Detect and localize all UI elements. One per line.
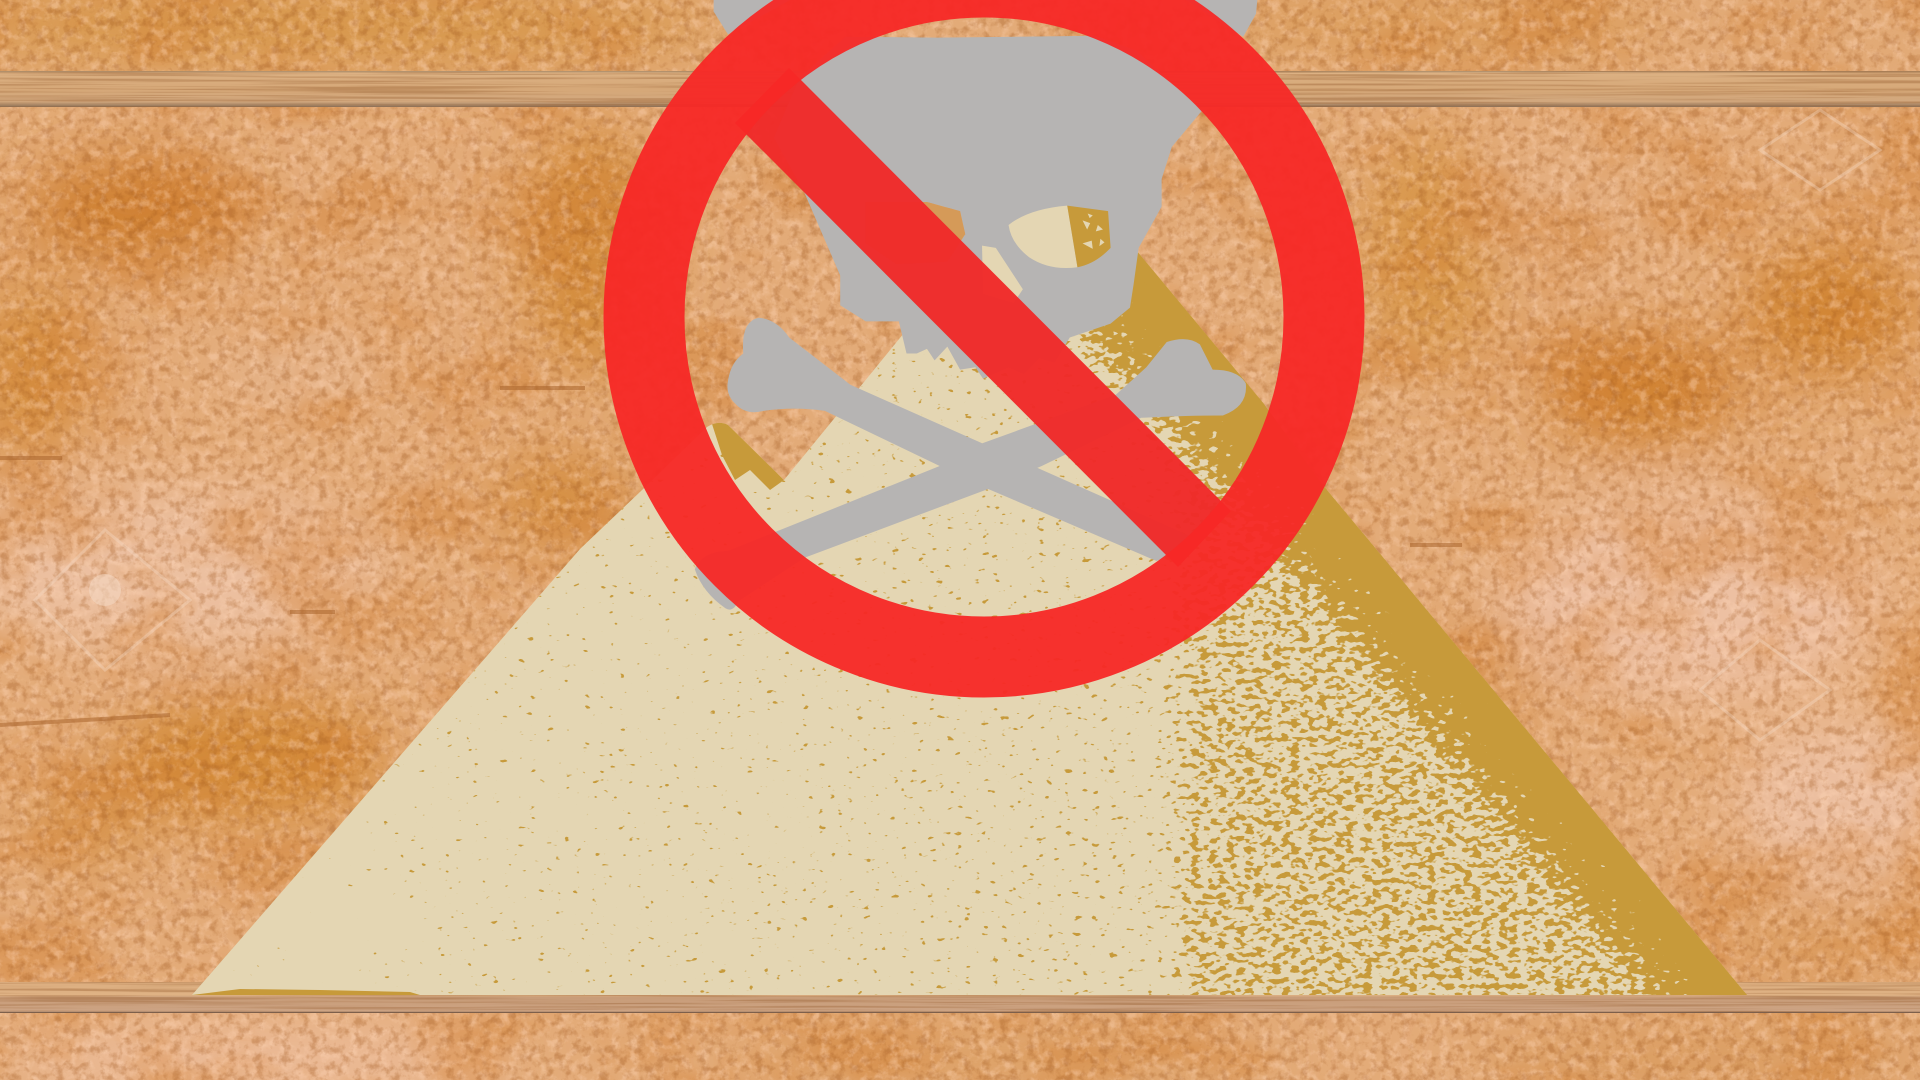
crossbone one <box>727 318 1192 561</box>
red slash <box>735 68 1231 567</box>
pyramid upper right shade <box>1138 252 1264 404</box>
pyramid shaded right edge <box>1065 252 1747 995</box>
skull cranium and jaw <box>774 36 1202 379</box>
nose cavity <box>982 246 1023 303</box>
top wooden plank <box>0 71 1920 107</box>
bottom wooden plank <box>0 982 1920 1013</box>
pyramid <box>180 240 1760 1000</box>
skull and crossbones (grey) <box>695 0 1258 610</box>
skull top right lobe <box>1182 0 1258 37</box>
crossbone two <box>695 339 1246 610</box>
pyramid shaded speckle <box>180 240 1760 1000</box>
prohibition sign <box>644 0 1324 657</box>
pyramid gold notch edge <box>712 422 784 490</box>
right eye socket <box>1009 206 1111 268</box>
pyramid base gold strip <box>192 989 420 995</box>
left eye socket <box>866 202 965 264</box>
pyramid lit face <box>180 240 1760 1000</box>
skull top left lobe <box>714 0 794 34</box>
red ring <box>644 0 1324 657</box>
